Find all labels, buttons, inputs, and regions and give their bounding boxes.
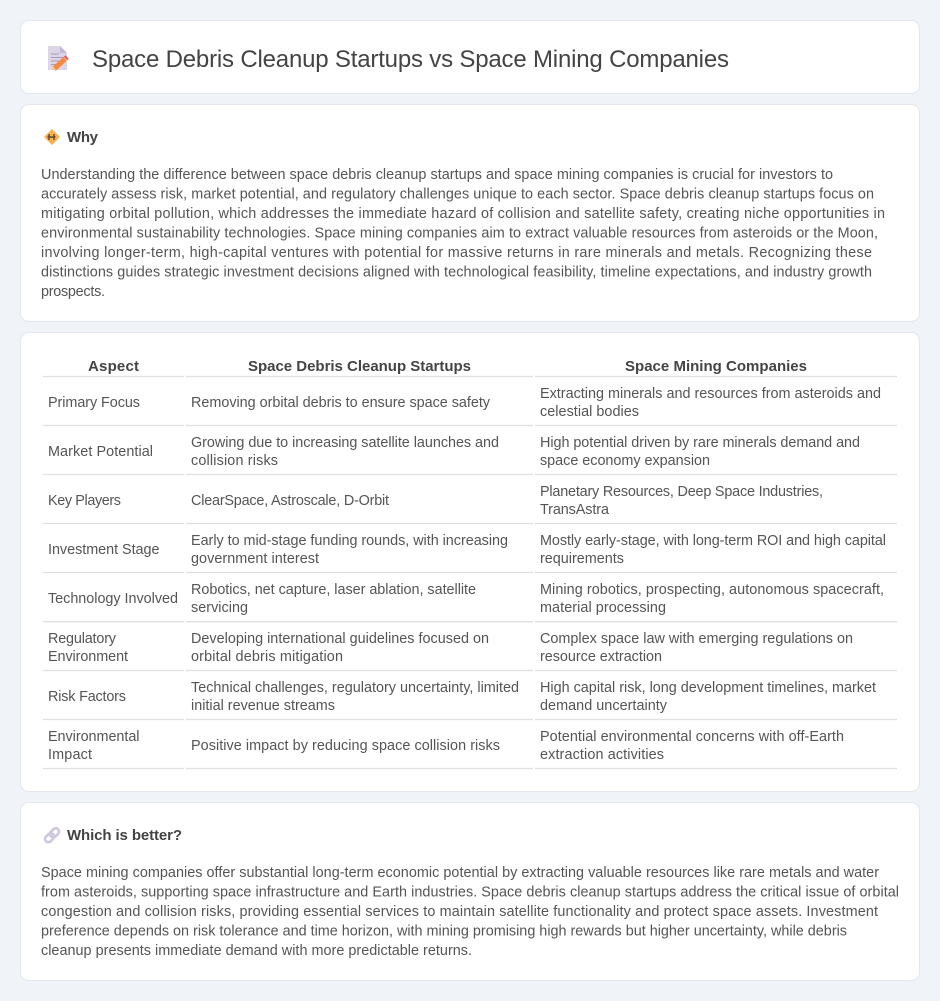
- text block: why paragraph: [41, 167, 885, 300]
- row: key players: Planetary Resources, Deep Space Industries,: [540, 484, 823, 500]
- row: environmental impact: Positive impact by reducing space collision risks: [191, 738, 500, 754]
- text block: which is better paragraph: cleanup presents immediate demand with more predictable returns.: [41, 943, 472, 959]
- row: key players: Key Players: [48, 493, 121, 509]
- icon: link: [44, 827, 60, 844]
- row: risk factors: [48, 680, 876, 714]
- row: market potential: collision risks: [191, 453, 278, 469]
- row: environmental impact: [48, 729, 844, 763]
- row: market potential: High potential driven by rare minerals demand and: [540, 435, 860, 451]
- row: investment stage: Mostly early-stage, with long-term ROI and high capital: [540, 533, 886, 549]
- text block: why paragraph: environmental sustainability technologies. Space mining companies aim to extract valuable resources from asteroids or the Moon,: [41, 226, 878, 242]
- row: regulatory environment: resource extraction: [540, 649, 662, 665]
- row: key players: ClearSpace, Astroscale, D-Orbit: [191, 493, 389, 509]
- row: primary focus: Removing orbital debris to ensure space safety: [191, 395, 491, 411]
- row: risk factors: initial revenue streams: [191, 698, 335, 714]
- row: technology involved: material processing: [540, 600, 666, 616]
- table header: Space Debris Cleanup Startups: [248, 358, 471, 375]
- row: regulatory environment: Complex space law with emerging regulations on: [540, 631, 853, 647]
- table header: Aspect: [88, 358, 139, 375]
- row: market potential: [48, 435, 860, 469]
- text block: which is better paragraph: Space mining companies offer substantial long-term economic potential by extracting valuable resources like rare metals and water: [41, 865, 879, 881]
- row: primary focus: Primary Focus: [48, 395, 140, 411]
- panel: which is better: [20, 802, 920, 980]
- row: investment stage: government interest: [191, 551, 319, 567]
- panel: comparison table: [20, 332, 920, 792]
- row: technology involved: servicing: [191, 600, 248, 616]
- text block: why paragraph: involving longer-term, high-capital ventures with potential for massive returns in rare minerals and metals. Recognizing these: [41, 245, 872, 261]
- row: regulatory environment: Environment: [48, 649, 128, 665]
- row: technology involved: Robotics, net capture, laser ablation, satellite: [191, 582, 476, 598]
- panel: title header: [20, 20, 920, 94]
- row: market potential: Growing due to increasing satellite launches and: [191, 435, 499, 451]
- row: regulatory environment: Developing international guidelines focused on: [191, 631, 489, 647]
- row: environmental impact: extraction activities: [540, 747, 664, 763]
- row: investment stage: requirements: [540, 551, 624, 567]
- row: technology involved: [48, 582, 884, 616]
- row: investment stage: [48, 533, 886, 567]
- row: regulatory environment: [48, 631, 853, 665]
- text block: why paragraph: mitigating orbital pollution, which addresses the immediate hazard of collision and satellite safety, creating niche opportunities in: [41, 206, 885, 222]
- heading: why: Why: [67, 129, 99, 146]
- title: Space Debris Cleanup Startups vs Space Mining Companies: [92, 46, 729, 73]
- text block: which is better paragraph: preference depends on risk tolerance and time horizon, with mining promising high rewards but higher uncertainty, while debris: [41, 924, 847, 940]
- row: risk factors: Technical challenges, regulatory uncertainty, limited: [191, 680, 519, 696]
- row: investment stage: Investment Stage: [48, 542, 160, 558]
- table header: [88, 358, 807, 375]
- row: risk factors: demand uncertainty: [540, 698, 668, 714]
- text block: which is better paragraph: congestion and collision risks, providing essential services to maintain satellite functionality and protect space assets. Investment: [41, 904, 878, 920]
- row: investment stage: Early to mid-stage funding rounds, with increasing: [191, 533, 508, 549]
- row: technology involved: Mining robotics, prospecting, autonomous spacecraft,: [540, 582, 884, 598]
- row: key players: [48, 484, 823, 518]
- row: market potential: space economy expansion: [540, 453, 710, 469]
- row: primary focus: [48, 386, 881, 420]
- text block: why paragraph: prospects.: [41, 284, 105, 300]
- row: key players: TransAstra: [540, 502, 609, 518]
- row: market potential: Market Potential: [48, 444, 153, 460]
- row: environmental impact: Potential environmental concerns with off-Earth: [540, 729, 844, 745]
- text block: which is better paragraph: from asteroids, supporting space infrastructure and Earth industries. Space debris cleanup startups address the critical issue of orbital: [41, 884, 899, 900]
- text block: which is better paragraph: [41, 865, 899, 959]
- text block: why paragraph: Understanding the difference between space debris cleanup startups and space mining companies is crucial for investors to: [41, 167, 833, 183]
- icon: document with pencil: [48, 46, 67, 70]
- row: risk factors: High capital risk, long development timelines, market: [540, 680, 876, 696]
- icon: orange diamond: [44, 129, 60, 145]
- row: risk factors: Risk Factors: [48, 689, 126, 705]
- row: environmental impact: Impact: [48, 747, 92, 763]
- row: technology involved: Technology Involved: [48, 591, 178, 607]
- row: regulatory environment: Regulatory: [48, 631, 117, 647]
- heading: which is better: Which is better?: [67, 827, 182, 844]
- row: regulatory environment: orbital debris mitigation: [191, 649, 343, 665]
- row: environmental impact: Environmental: [48, 729, 140, 745]
- row: primary focus: celestial bodies: [540, 404, 639, 420]
- text block: why paragraph: accurately assess risk, market potential, and regulatory challenges unique to each sector. Space debris cleanup startups focus on: [41, 186, 874, 202]
- text block: why paragraph: distinctions guides strategic investment decisions aligned with technological feasibility, timeline expectations, and industry growth: [41, 264, 872, 280]
- row: primary focus: Extracting minerals and resources from asteroids and: [540, 386, 881, 402]
- table header: Space Mining Companies: [625, 358, 807, 375]
- panel: why: [20, 104, 920, 322]
